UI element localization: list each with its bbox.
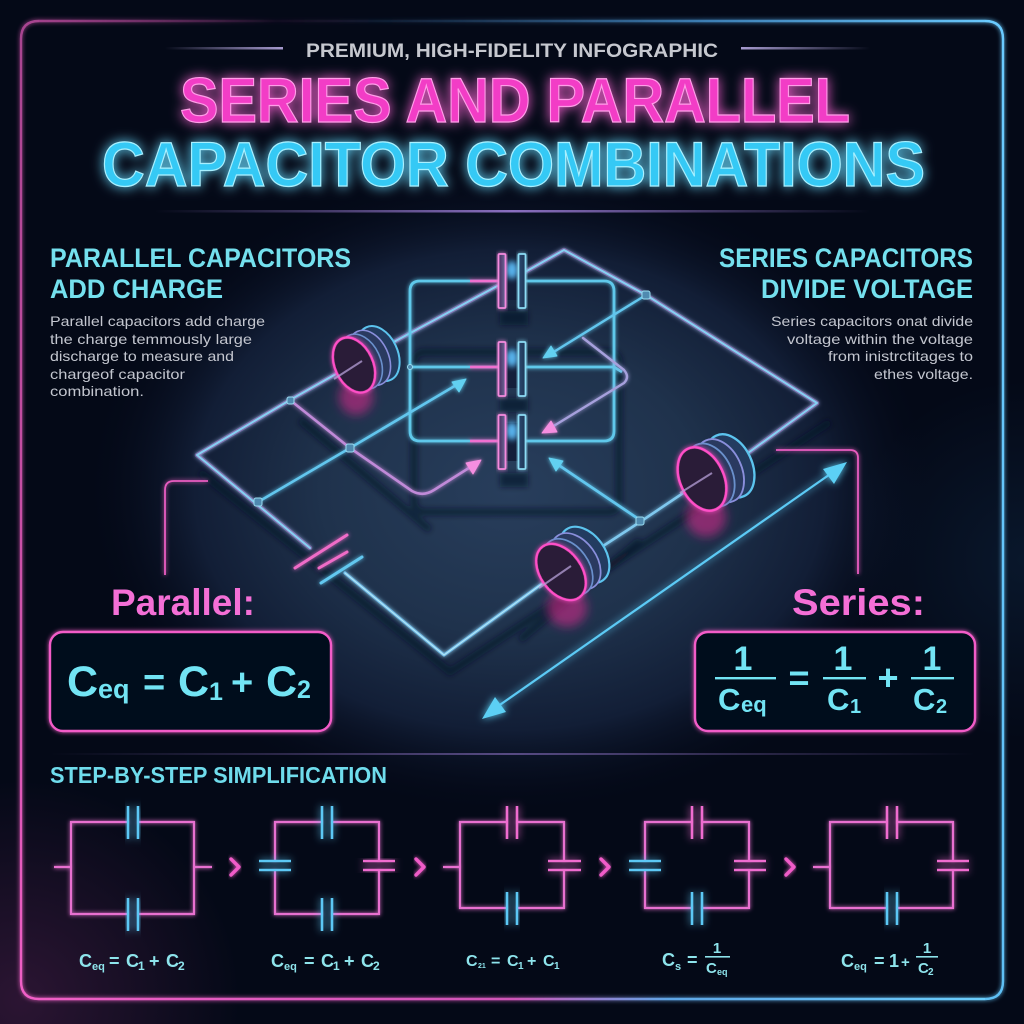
parallel formula: C (178, 658, 209, 706)
section heading: step-by-step: STEP-BY-STEP SIMPLIFICATION (50, 762, 387, 788)
panel: parallel description: Parallel capacitors add charge (50, 313, 265, 329)
floor shadows (200, 318, 830, 672)
stacked capacitor: top (498, 254, 526, 308)
panel: parallel description: discharge to measure and (50, 348, 234, 364)
parallel formula: 2 (297, 676, 311, 704)
panel: series description: DIVIDE VOLTAGE (761, 274, 973, 304)
header eyebrow: PREMIUM, HIGH-FIDELITY INFOGRAPHIC (306, 41, 718, 62)
step 1 formula: C (126, 951, 139, 971)
parallel formula: 1 (209, 678, 223, 706)
step 4 formula: C (706, 960, 717, 977)
battery symbol (295, 535, 362, 583)
step 1 formula: + (149, 951, 160, 971)
series formula: + (877, 657, 899, 698)
panel: parallel description: combination. (50, 383, 144, 399)
parallel formula (50, 582, 331, 731)
step 4 formula: 1 (713, 940, 721, 957)
step 4 formula: eq (717, 967, 728, 977)
wire junction nodes (254, 291, 650, 525)
step 3 formula: 1 (554, 961, 560, 972)
step 2 schematic (259, 806, 395, 931)
parallel formula: Parallel: (111, 582, 255, 623)
callout line: left (165, 481, 208, 575)
disc capacitor: upper left (325, 319, 408, 415)
disc capacitor: bottom (526, 517, 620, 627)
step 3 formula: 21 (478, 963, 486, 970)
step 2 formula: + (344, 951, 355, 971)
panel: parallel description: ADD CHARGE (50, 274, 223, 304)
step 2 formula: C (361, 951, 374, 971)
step 2 formula: C (321, 951, 334, 971)
panel: series description: SERIES CAPACITORS (719, 243, 973, 273)
step 3 formula: C (466, 953, 478, 970)
step 4 formula: s (675, 961, 681, 973)
title (102, 66, 925, 200)
step 4 schematic (629, 806, 766, 925)
central floor glow (90, 170, 930, 810)
step 5 formula: = (874, 951, 885, 971)
parallel formula: + (231, 662, 253, 704)
stacked capacitor: middle (498, 342, 526, 396)
step 3 formula: = (491, 953, 500, 970)
panel: series description: ethes voltage. (874, 366, 973, 382)
series formula: C (913, 682, 935, 717)
series formula: C (718, 682, 740, 717)
step 4 formula: C (662, 950, 675, 970)
step 1 formula: C (166, 951, 179, 971)
step 5 formula (841, 940, 938, 978)
inner rectangular bus (410, 281, 622, 441)
chevron 3 (601, 859, 609, 875)
step 5 formula: 2 (928, 967, 934, 978)
step 1 formula: = (109, 951, 120, 971)
step 2 formula: 1 (333, 959, 340, 973)
step 5 schematic (813, 806, 969, 925)
disc capacitor: lower right (668, 426, 764, 537)
chevron 4 (786, 859, 794, 875)
series formula: C (827, 682, 849, 717)
panel: parallel description: PARALLEL CAPACITORS (50, 243, 351, 273)
parallel formula: C (266, 658, 297, 706)
step 3 formula: C (543, 953, 555, 970)
3D circuit diagram (197, 250, 847, 719)
step 5 formula: C (918, 960, 929, 977)
step 5 formula: eq (854, 961, 867, 973)
parallel formula: C (67, 658, 98, 706)
panel: series description: from inistrctitages to (828, 348, 973, 364)
right side tint (844, 380, 1024, 740)
series formula: 1 (923, 640, 941, 678)
step 2 formula: C (271, 951, 284, 971)
step 5 formula: + (901, 954, 910, 971)
series formula: eq (741, 692, 767, 717)
series formula: 2 (936, 696, 947, 718)
series formula (695, 582, 975, 731)
panel: parallel description (50, 243, 351, 399)
title: CAPACITOR COMBINATIONS (102, 130, 925, 200)
step 1 formula: 2 (178, 959, 185, 973)
panel: series description: voltage within the voltage (787, 331, 973, 347)
step 1 formula: 1 (138, 959, 145, 973)
stacked capacitor: bottom (498, 415, 526, 469)
parallel formula: = (143, 662, 165, 704)
step 1 formula: eq (92, 961, 105, 973)
series formula: 1 (834, 640, 852, 678)
step 5 formula: 1 (923, 940, 931, 957)
large double arrow (482, 462, 847, 719)
panel: parallel description: the charge temmously large (50, 331, 252, 347)
callout line: right (776, 450, 858, 574)
step 4 formula: = (687, 950, 698, 970)
step 3 schematic (443, 806, 581, 925)
step 2 formula: = (304, 951, 315, 971)
corner tint (0, 780, 240, 1024)
series formula: 1 (734, 640, 752, 678)
series formula: 1 (850, 696, 861, 718)
step 2 formula: eq (284, 961, 297, 973)
series formula: Series: (792, 582, 925, 623)
step 1 formula: C (79, 951, 92, 971)
step 3 formula: C (507, 953, 519, 970)
step 2 formula: 2 (373, 959, 380, 973)
step 3 formula: 1 (518, 961, 524, 972)
panel: series description: Series capacitors onat divide (771, 313, 973, 329)
chevron 2 (416, 859, 424, 875)
step 5 formula: 1 (889, 951, 899, 971)
panel: series description (719, 243, 973, 382)
step 3 formula: + (527, 953, 536, 970)
parallel formula: eq (98, 674, 130, 704)
title: SERIES AND PARALLEL (180, 66, 850, 136)
panel: parallel description: chargeof capacitor (50, 366, 185, 382)
outer wire loop (197, 250, 817, 655)
chevron 1 (231, 859, 239, 875)
step 5 formula: C (841, 951, 854, 971)
series formula: = (788, 657, 810, 698)
step 4 formula (662, 940, 730, 977)
step 1 schematic (54, 806, 212, 931)
internal wires and arrows (258, 295, 646, 520)
